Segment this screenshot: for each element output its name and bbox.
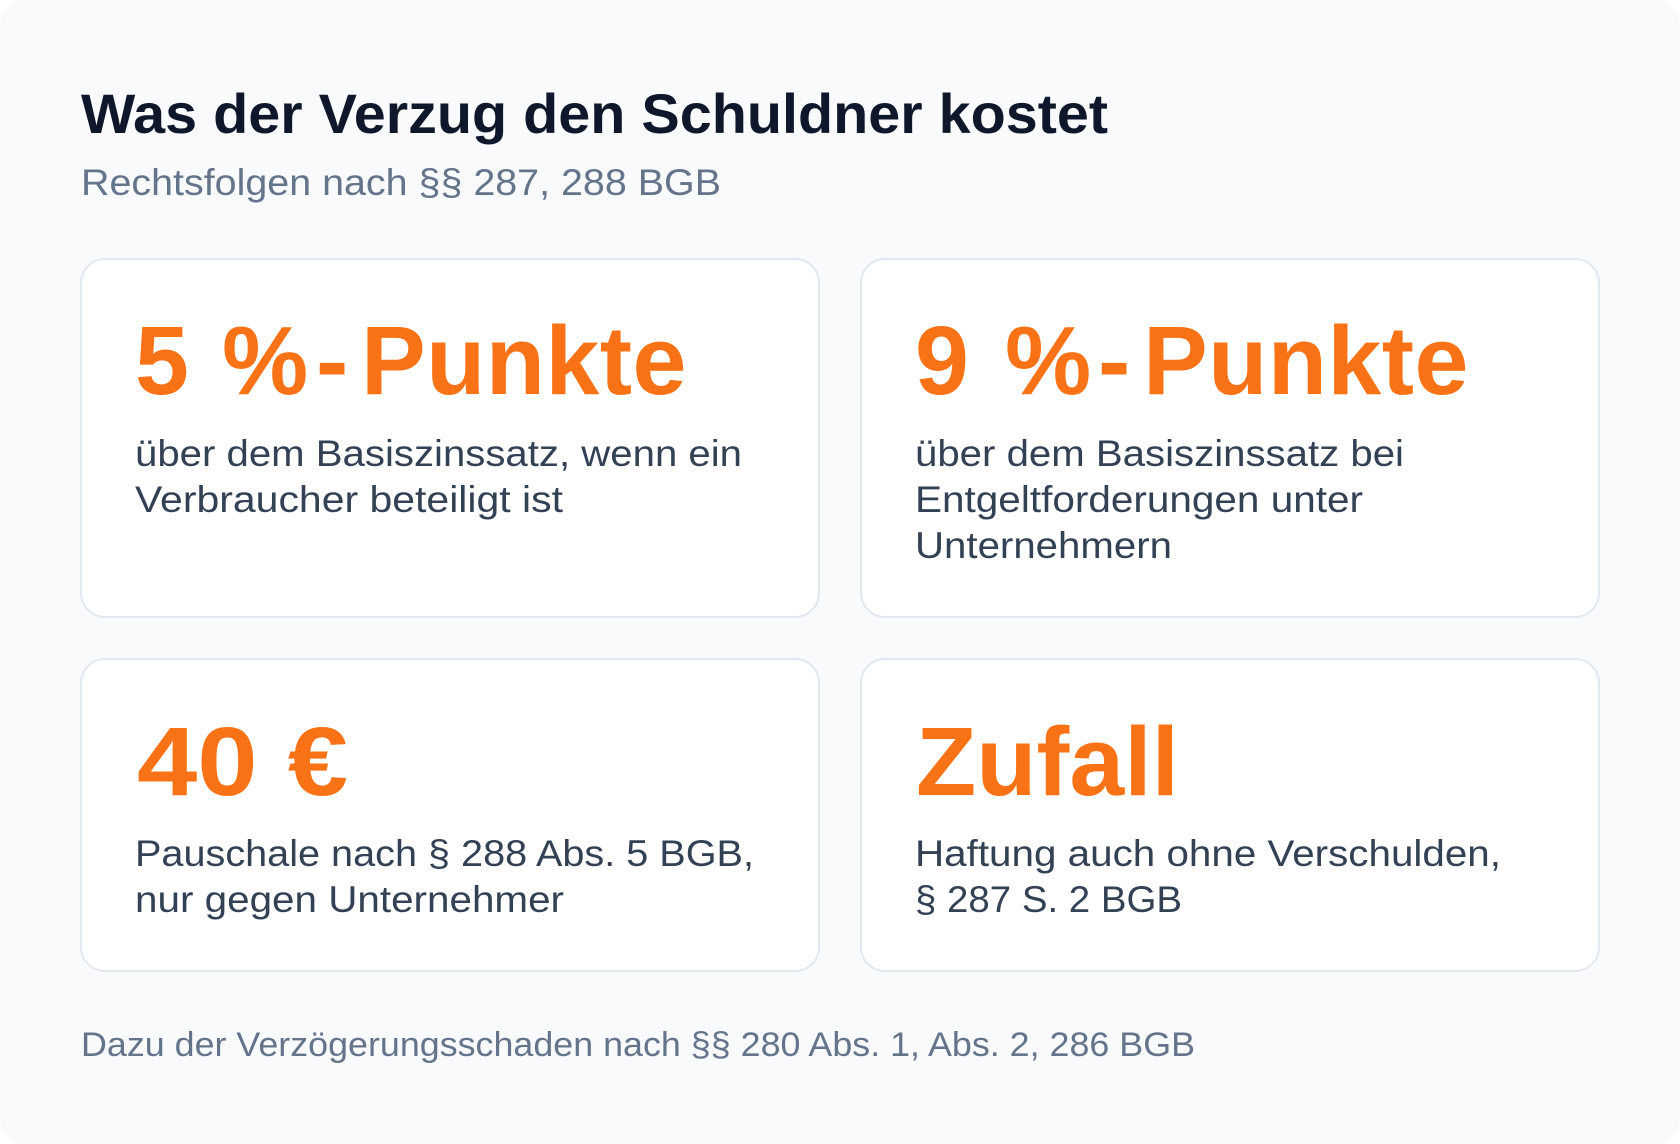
big figure: 40 €: 40 € xyxy=(137,707,348,816)
description: flat fee: nur gegen Unternehmer xyxy=(135,879,564,920)
big figure: 9 %-Punkte: % xyxy=(1005,306,1091,415)
title: Was der Verzug den Schuldner kostet xyxy=(81,82,1108,145)
panel: 40 € xyxy=(81,659,819,971)
description: flat fee: Pauschale nach § 288 Abs. 5 BGB, xyxy=(135,833,754,874)
description: businesses: Unternehmern xyxy=(915,525,1172,566)
panel: 5 %-Punkte xyxy=(81,259,819,617)
big figure: 5 %-Punkte: - xyxy=(316,306,348,415)
subtitle: Rechtsfolgen nach §§ 287, 288 BGB xyxy=(81,162,721,203)
description: liability: § 287 S. 2 BGB xyxy=(915,879,1182,920)
description: flat fee xyxy=(135,833,754,920)
big figure: Zufall: Zufall xyxy=(916,707,1179,816)
big figure: 5 %-Punkte: % xyxy=(222,306,308,415)
description: businesses: Entgeltforderungen unter xyxy=(915,479,1363,520)
panel: 9 %-Punkte xyxy=(861,259,1599,617)
description: consumer xyxy=(135,433,742,520)
description: businesses xyxy=(915,433,1404,566)
description: consumer: Verbraucher beteiligt ist xyxy=(135,479,564,520)
big figure: 5 %-Punkte: 5 xyxy=(135,306,216,415)
footnote: Dazu der Verzögerungsschaden nach §§ 280 Abs. 1, Abs. 2, 286 BGB xyxy=(81,1026,1195,1064)
big figure: 9 %-Punkte: Punkte xyxy=(1143,306,1469,415)
description: consumer: über dem Basiszinssatz, wenn ein xyxy=(135,433,742,474)
big figure: 9 %-Punkte: - xyxy=(1098,306,1130,415)
description: liability: Haftung auch ohne Verschulden, xyxy=(915,833,1501,874)
panel: Zufall xyxy=(861,659,1599,971)
big figure: 9 %-Punkte: 9 xyxy=(915,306,996,415)
description: liability xyxy=(915,833,1501,920)
big figure: 5 %-Punkte: Punkte xyxy=(361,306,687,415)
description: businesses: über dem Basiszinssatz bei xyxy=(915,433,1404,474)
